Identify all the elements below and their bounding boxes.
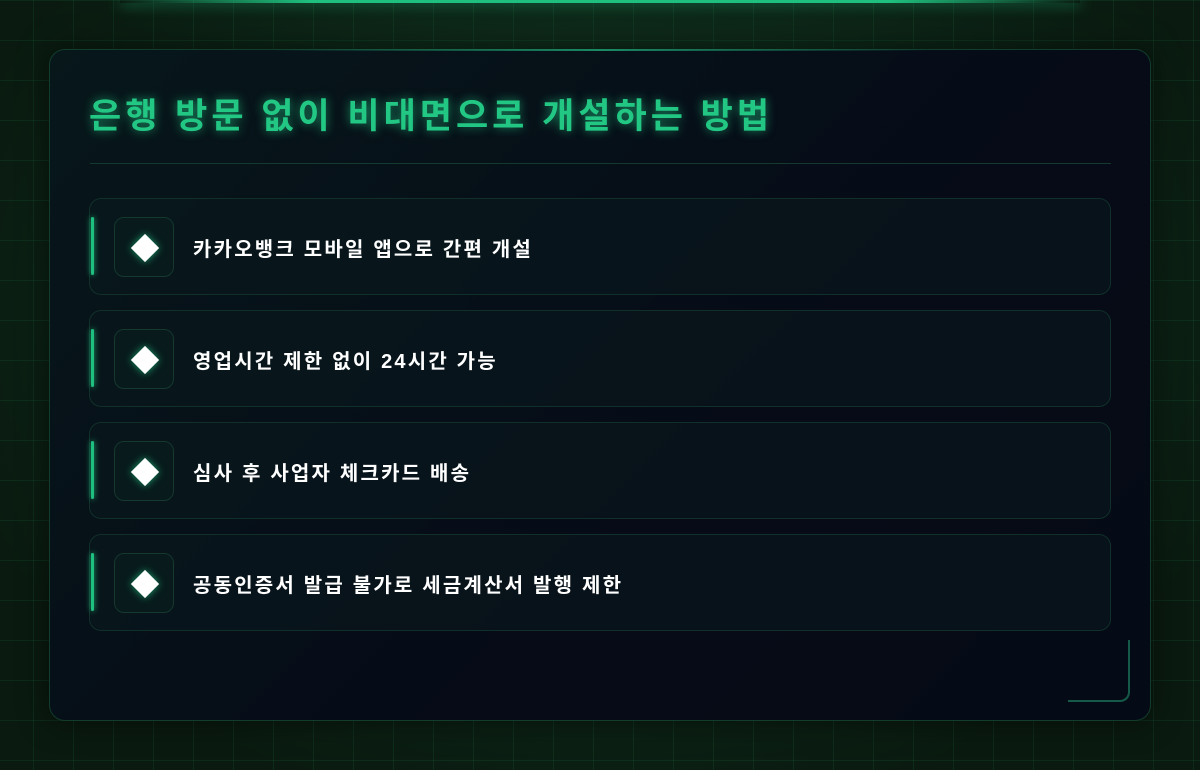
corner accent xyxy=(1068,640,1130,702)
icon: diamond xyxy=(114,329,174,389)
icon: diamond xyxy=(114,553,174,613)
text: 영업시간 제한 없이 24시간 가능 xyxy=(193,351,498,373)
text: 카카오뱅크 모바일 앱으로 간편 개설 xyxy=(193,239,533,261)
icon: diamond xyxy=(114,441,174,501)
item 3 xyxy=(89,422,1111,519)
item 4 xyxy=(89,534,1111,631)
text: 심사 후 사업자 체크카드 배송 xyxy=(193,463,471,485)
text: 공동인증서 발급 불가로 세금계산서 발행 제한 xyxy=(193,575,623,597)
item 2 xyxy=(89,310,1111,407)
icon: diamond xyxy=(114,217,174,277)
item 1 xyxy=(89,198,1111,295)
title: 은행 방문 없이 비대면으로 개설하는 방법 xyxy=(89,97,773,136)
